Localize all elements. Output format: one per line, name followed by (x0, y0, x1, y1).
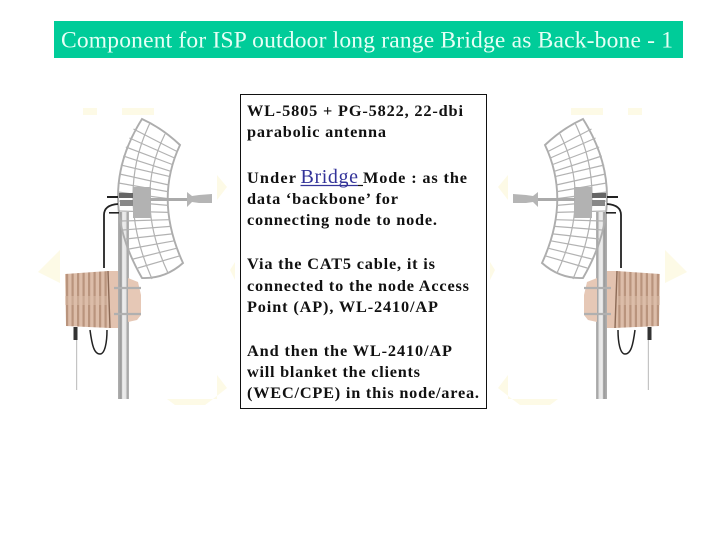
description text panel: Mode : as the (363, 168, 467, 187)
right antenna illustration (mirrored) (490, 108, 687, 405)
description text panel: data ‘backbone’ for (247, 189, 398, 208)
left antenna illustration (38, 108, 235, 405)
description text panel: Point (AP), WL-2410/AP (247, 297, 438, 316)
title banner: Component for ISP outdoor long range Bridge as Back-bone - 1 (61, 28, 673, 54)
description text panel: WL-5805 + PG-5822, 22-dbi (247, 101, 463, 120)
description text panel: connecting node to node. (247, 210, 437, 229)
description text panel: And then the WL-2410/AP (247, 341, 452, 360)
title banner (54, 21, 683, 58)
description text panel: Via the CAT5 cable, it is (247, 254, 435, 273)
description text panel: parabolic antenna (247, 122, 386, 141)
description text panel: (WEC/CPE) in this node/area. (247, 383, 479, 402)
description text panel (240, 94, 486, 408)
description text panel: Under (247, 168, 296, 187)
description text panel: connected to the node Access (247, 276, 469, 295)
description text panel: Bridge (300, 166, 358, 188)
description text panel: will blanket the clients (247, 362, 420, 381)
